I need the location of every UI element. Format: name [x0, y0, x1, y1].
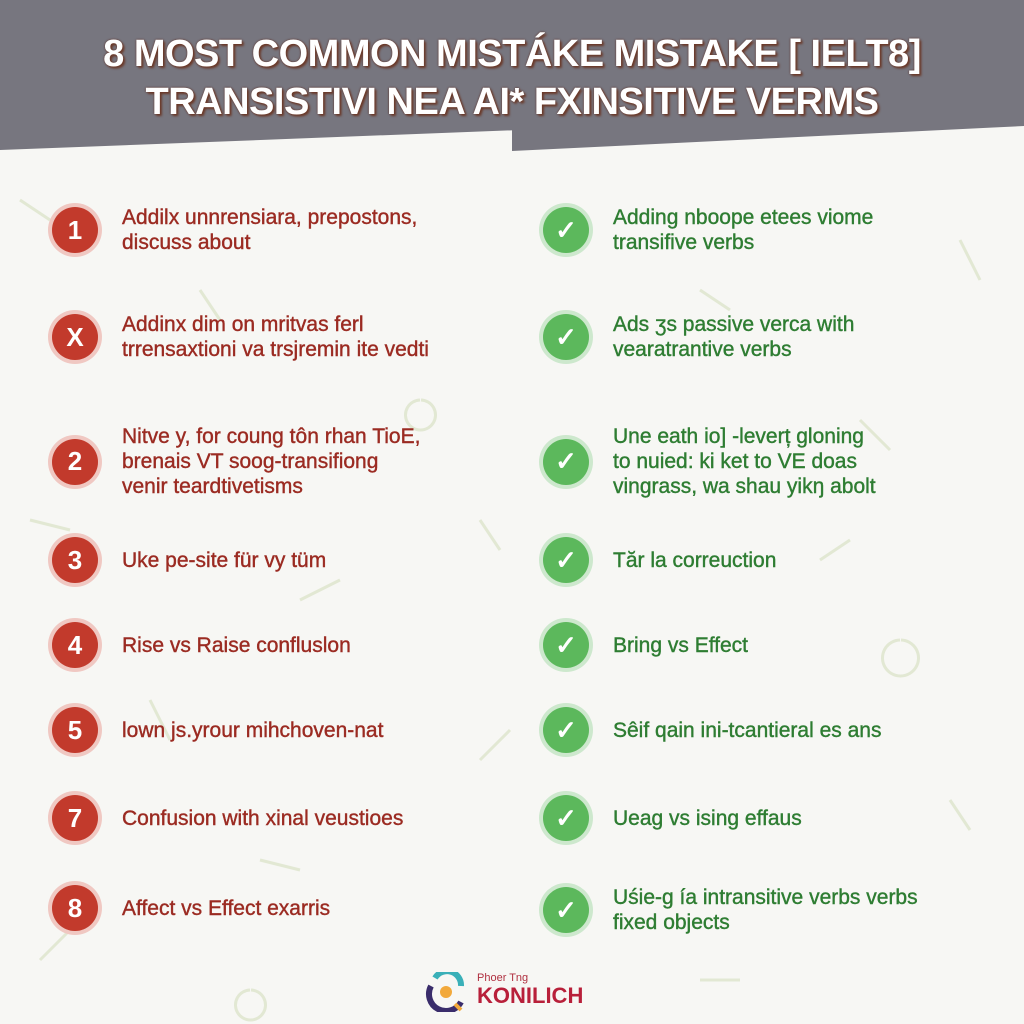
logo: KONILICH [477, 983, 583, 1008]
right item 3: ✓ [555, 446, 577, 476]
right item 2: Ads ʒs passive verca with [613, 313, 854, 336]
right item 7: ✓ [555, 802, 577, 832]
left item 1 [48, 203, 417, 257]
icon: logo mark [426, 972, 464, 1012]
left item 5: 5 [68, 714, 82, 744]
right item 2 [539, 310, 854, 364]
left item 1: 1 [68, 214, 82, 244]
left item 2: brenais VT soog-transifiong [122, 450, 378, 473]
right item 2: vearatrantive verbs [613, 338, 792, 361]
right item 5 [539, 618, 748, 672]
left item 8 [48, 881, 330, 935]
left item X [48, 310, 429, 364]
right item 8 [539, 883, 918, 937]
left item 5 [48, 703, 384, 757]
right item 4 [539, 533, 776, 587]
right item 3: Une eath io] -leverț gloning [613, 425, 864, 448]
right item 3 [539, 425, 876, 498]
right item 6: Sêif qain ini-tcantieral es ans [613, 718, 881, 742]
left item 8: 8 [68, 892, 82, 922]
left item 7 [48, 791, 403, 845]
left item 3 [48, 533, 326, 587]
logo [426, 972, 583, 1012]
title: 8 MOST COMMON MISTÁKE MISTAKE [ IELT8] [103, 33, 921, 75]
right item 8: ✓ [555, 894, 577, 924]
left item 8: Affect vs Effect exarris [122, 896, 330, 920]
left item 2 [48, 425, 420, 498]
title: TRANSISTIVI NEA AI* FXINSITIVE VERMS [146, 81, 878, 123]
left item 4: 4 [68, 630, 82, 660]
right item 1: ✓ [555, 214, 577, 244]
right item 5: Bring vs Effect [613, 634, 748, 656]
right item 6 [539, 703, 881, 757]
right item 3: to nuied: ki ket to VE doas [613, 450, 857, 473]
left item 2: venir teardtivetisms [122, 475, 303, 498]
header banner [0, 0, 1024, 151]
right item 8: Uśie-g ía intransitive verbs verbs [613, 886, 918, 909]
right item 7 [539, 791, 802, 845]
right item 4: Tăr la correuction [613, 548, 776, 572]
right item 1: Adding nboope etees viome [613, 206, 873, 229]
right item 3: vingrass, wa shau yikŋ abolt [613, 475, 876, 498]
right item 6: ✓ [555, 714, 577, 744]
right item 8: fixed objects [613, 911, 730, 934]
right item 2: ✓ [555, 322, 577, 352]
left item 2: Nitve y, for coung tôn rhan TioE, [122, 425, 420, 448]
left item 3: 3 [68, 544, 82, 574]
left item 1: Addilx unnrensiara, prepostons, [122, 206, 417, 229]
left item 5: lown js.yrour mihchoven-nat [122, 718, 383, 742]
left item 7: 7 [68, 802, 82, 832]
left item 3: Uke pe-site für vy tüm [122, 548, 326, 572]
left item 2: 2 [68, 446, 82, 476]
left item X: trrensaxtioni va trsjremin ite vedti [122, 338, 429, 361]
left item 1: discuss about [122, 231, 250, 254]
left item 4 [48, 618, 351, 672]
left item X: Addinx dim on mritvas ferl [122, 313, 364, 336]
left item 7: Confusion with xinal veustioes [122, 806, 403, 830]
logo: Phoer Tng [477, 972, 528, 984]
right item 1 [539, 203, 873, 257]
right item 5: ✓ [555, 630, 577, 660]
title [103, 30, 923, 123]
right item 7: Ueag vs ising effaus [613, 806, 802, 830]
right item 1: transifive verbs [613, 231, 754, 254]
left item 4: Rise vs Raise confluslon [122, 634, 351, 656]
left item X: X [66, 322, 84, 352]
right item 4: ✓ [555, 544, 577, 574]
